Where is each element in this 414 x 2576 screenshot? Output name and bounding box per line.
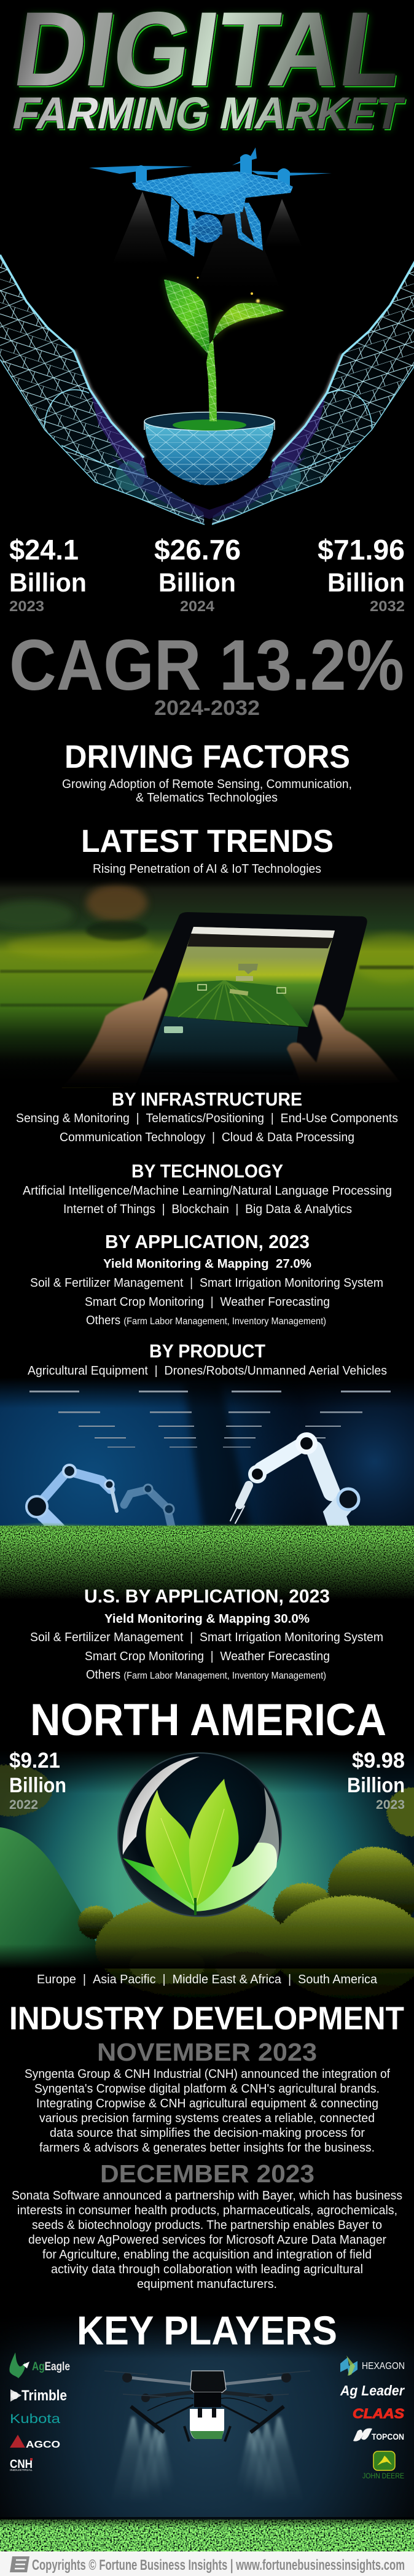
stat: 2024 market size: 2024 [180, 598, 215, 615]
development: december 2023: Sonata Software announced a partnership with Bayer, which has business [12, 2189, 402, 2203]
grass field [0, 1523, 414, 1599]
stat: north america 2023: $9.98 [352, 1749, 405, 1773]
robot arm: left [26, 1465, 117, 1529]
logo: john deere [362, 2451, 404, 2480]
stat: 2024 market size [154, 534, 241, 615]
development: november 2023: NOVEMBER 2023 [97, 2038, 317, 2066]
large left leaf [0, 1827, 106, 1969]
hands on tablet [61, 988, 400, 1088]
development: november 2023: data source that simplifies the decision-making process for [50, 2126, 365, 2140]
illustration: glowing bowl [111, 412, 306, 519]
stat: 2032 market size [318, 534, 405, 615]
illustration: seedling [164, 276, 284, 421]
other regions list: Europe | Asia Pacific | Middle East & Africa | South America [37, 1973, 378, 1986]
logo: trimble: Trimble [21, 2387, 67, 2404]
development: november 2023: Syngenta Group & CNH Industrial (CNH) announced the integration of [25, 2067, 390, 2081]
section: by infrastructure: BY INFRASTRUCTURE [112, 1088, 302, 1110]
section: u.s. by application: Smart Crop Monitoring | Weather Forecasting [85, 1650, 330, 1663]
section: driving factors: Growing Adoption of Remote Sensing, Communication, [62, 778, 352, 791]
logo: kubota: Kubota [10, 2412, 60, 2426]
section: by application 2023: Soil & Fertilizer Management | Smart Irrigation Monitoring System [30, 1276, 383, 1290]
stat: 2023 market size: 2023 [9, 598, 44, 615]
section: by application 2023: BY APPLICATION, 2023 [105, 1231, 310, 1252]
development: november 2023: Integrating Cropwise & CNH agricultural equipment & connecting [36, 2097, 378, 2110]
section: u.s. by application: Yield Monitoring & Mapping 30.0% [104, 1612, 310, 1626]
photo: farmer holding tablet in field [0, 875, 414, 1088]
footer logo [10, 2556, 29, 2572]
footer: copyright bar [0, 2551, 414, 2576]
section: u.s. by application: Others (Farm Labor Management, Inventory Management) [86, 1668, 326, 1682]
section: driving factors: DRIVING FACTORS [64, 739, 350, 775]
stat: north america 2022: $9.21 [9, 1749, 60, 1773]
logo: hexagon: HEXAGON [362, 2361, 405, 2371]
section: by technology: Artificial Intelligence/Machine Learning/Natural Language Processing [23, 1184, 392, 1198]
stat: north america 2022: Billion [9, 1774, 66, 1797]
development: november 2023: farmers & advisors & generates better insights for the business. [39, 2141, 375, 2155]
stat: 2024 market size: Billion [158, 568, 236, 598]
spray mist [111, 2417, 304, 2503]
glass bubble with leaves [118, 1753, 281, 1916]
development: december 2023: seeds & biotechnology products. The partnership enables Bayer to [32, 2219, 382, 2232]
section: latest trends [81, 824, 334, 876]
development: december 2023: interests in consumer health products, pharmaceuticals, agrochemicals, [17, 2204, 397, 2217]
logo: ageagle: AgEagle [32, 2360, 70, 2373]
development: november 2023: various precision farming systems creates a reliable, connected [39, 2112, 375, 2125]
development: december 2023: DECEMBER 2023 [100, 2160, 314, 2188]
section: by infrastructure: Communication Technology | Cloud & Data Processing [60, 1131, 354, 1144]
stat: north america 2023: Billion [347, 1774, 405, 1797]
section: by technology: Internet of Things | Blockchain | Big Data & Analytics [63, 1203, 352, 1216]
section: u.s. by application: U.S. BY APPLICATION, 2023 [84, 1585, 330, 1607]
agricultural drone [104, 2371, 310, 2441]
stat: 2032 market size: $71.96 [318, 534, 405, 566]
heading: key players: KEY PLAYERS [77, 2308, 337, 2353]
stat: north america 2022: 2022 [9, 1798, 38, 1812]
illustration: wireframe right hand [212, 259, 414, 525]
stat: 2023 market size: $24.1 [9, 534, 79, 566]
logo: cnh industrial: CNH [10, 2458, 33, 2471]
logo: hexagon [340, 2355, 405, 2376]
section: by application 2023: Smart Crop Monitoring | Weather Forecasting [85, 1295, 330, 1309]
ceiling lights [29, 1391, 391, 1448]
logo: cnh industrial: INDUSTRIAL [10, 2469, 33, 2472]
logo: ag leader: Ag Leader [340, 2383, 405, 2398]
logo: agco: AGCO [26, 2440, 60, 2450]
section: u.s. by application: Soil & Fertilizer Management | Smart Irrigation Monitoring System [30, 1631, 383, 1644]
logo: topcon [353, 2429, 404, 2441]
section: driving factors [62, 739, 352, 805]
stat: 2032 market size: Billion [327, 568, 405, 598]
development: december 2023 [12, 2160, 402, 2291]
logo: topcon: TOPCON [372, 2432, 404, 2441]
section: by infrastructure [16, 1088, 398, 1144]
stat: 2024 market size: $26.76 [154, 534, 241, 566]
illustration: wireframe drone [89, 147, 332, 288]
section: by infrastructure: Sensing & Monitoring | Telematics/Positioning | End-Use Components [16, 1112, 398, 1125]
robot arm: far [124, 1485, 174, 1529]
section: latest trends: LATEST TRENDS [81, 824, 334, 859]
development: november 2023: Syngenta's Cropwise digital platform & CNH's agricultural brands. [34, 2082, 380, 2096]
stat: 2023 market size [9, 534, 87, 615]
section: by product [28, 1340, 387, 1378]
photo: leaf in glass bubble on moss [0, 1751, 414, 1999]
section: by application 2023 [30, 1231, 383, 1327]
development: december 2023: for Agriculture, enabling the acquisition and integration of field [42, 2248, 372, 2262]
section: by product: BY PRODUCT [149, 1340, 265, 1362]
section: by application 2023: Yield Monitoring & Mapping 27.0% [103, 1257, 311, 1271]
stat: north america 2022 [9, 1749, 66, 1812]
section: by application 2023: Others (Farm Labor Management, Inventory Management) [86, 1314, 326, 1327]
logo: claas: CLAAS [353, 2406, 404, 2421]
section: driving factors: & Telematics Technologies [136, 791, 278, 805]
moss mounds [78, 1847, 414, 1999]
heading: north america: NORTH AMERICA [30, 1695, 386, 1745]
development: december 2023: activity data through collaboration with leading agricultural [51, 2263, 363, 2276]
section: latest trends: Rising Penetration of AI & IoT Technologies [93, 862, 321, 876]
logo: agco [10, 2435, 60, 2450]
development: december 2023: develop new AgPowered services for Microsoft Azure Data Manager [28, 2233, 386, 2247]
logo: john deere: JOHN DEERE [362, 2472, 404, 2480]
stat: 2023 market size: Billion [9, 568, 87, 598]
robot arm: right [230, 1435, 359, 1532]
section: by product: Agricultural Equipment | Drones/Robots/Unmanned Aerial Vehicles [28, 1364, 387, 1378]
stat: north america 2023: 2023 [376, 1798, 405, 1812]
illustration: wireframe left hand [0, 255, 205, 525]
cagr figure: 2024-2032 [154, 697, 260, 720]
development: november 2023 [25, 2038, 390, 2155]
tablet [138, 912, 367, 1087]
section: u.s. by application [30, 1585, 383, 1682]
logo: ageagle [9, 2352, 70, 2378]
section: by technology [23, 1160, 392, 1216]
photo: spraying drone background [0, 2316, 414, 2551]
section: by technology: BY TECHNOLOGY [131, 1160, 283, 1182]
stat: 2032 market size: 2032 [370, 598, 405, 615]
photo: robot arms over crops [0, 1378, 414, 1599]
development: december 2023: equipment manufacturers. [137, 2277, 277, 2291]
stat: north america 2023 [347, 1749, 405, 1812]
grass strip [0, 2517, 414, 2551]
